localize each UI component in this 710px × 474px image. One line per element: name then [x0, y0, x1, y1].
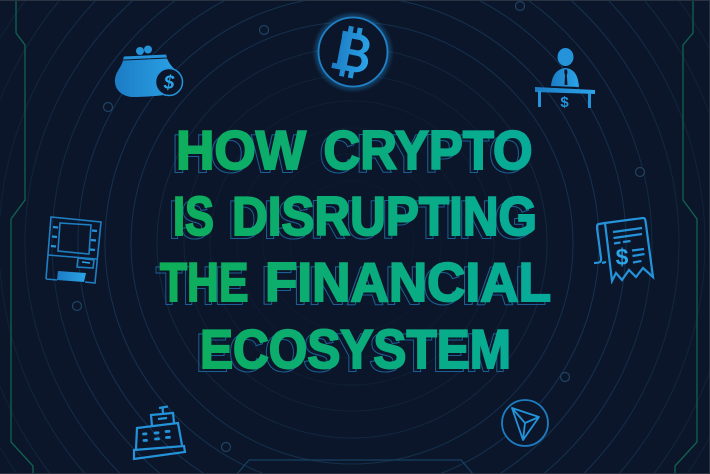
title outline shadow: [156, 122, 546, 384]
title fill: CRYPTO: [324, 119, 532, 181]
icon: banker at desk: [535, 48, 595, 111]
icon: receipt: $: [616, 244, 629, 270]
icon: ATM machine: [46, 217, 101, 283]
title fill: THE: [160, 251, 248, 313]
title fill: FINANCIAL: [265, 251, 551, 313]
title outline shadow: DISRUPTING: [228, 188, 532, 250]
green frame line left: [11, 0, 33, 474]
title fill: HOW: [176, 119, 306, 181]
title fill: ECOSYSTEM: [200, 318, 511, 380]
icon: coin purse: $: [163, 73, 175, 94]
icon: receipt: [594, 218, 653, 281]
icon: banker at desk: $: [560, 94, 569, 111]
icon: tron coin: [502, 400, 548, 446]
icon: cash register: [134, 406, 185, 459]
title outline shadow: THE: [156, 254, 244, 316]
green frame line right: [675, 0, 697, 474]
title outline shadow: ECOSYSTEM: [196, 322, 506, 384]
blue frame line bottom: [237, 460, 473, 474]
title fill: [160, 119, 551, 380]
icon: bitcoin coin: [312, 11, 394, 93]
title fill: IS: [173, 185, 214, 247]
title outline shadow: CRYPTO: [319, 122, 528, 184]
title outline shadow: HOW: [172, 122, 302, 184]
orbit nodes: [72, 2, 644, 452]
icon: coin purse: [115, 46, 182, 97]
title outline shadow: FINANCIAL: [260, 254, 546, 316]
title: [156, 119, 551, 384]
title outline shadow: IS: [168, 188, 210, 250]
title fill: DISRUPTING: [232, 185, 537, 247]
